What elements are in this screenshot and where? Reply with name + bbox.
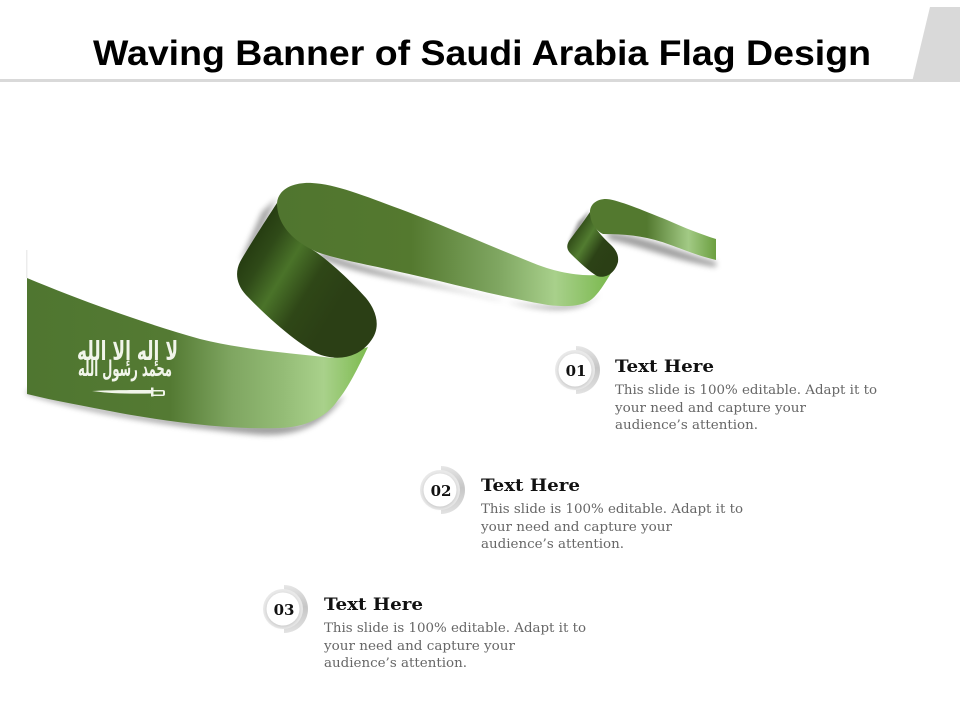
ribbon banner xyxy=(26,183,716,435)
ribbon fold: small dark xyxy=(567,212,618,277)
header rule xyxy=(0,79,914,82)
badge 02 xyxy=(420,466,465,514)
badge 03: 03 xyxy=(274,601,294,619)
body 01 xyxy=(614,383,877,433)
body 02: This slide is 100% editable. Adapt it to xyxy=(481,502,743,517)
ribbon segment: left with flag xyxy=(27,278,368,428)
badge 01: 01 xyxy=(566,362,586,380)
body 01: your need and capture your xyxy=(614,401,807,416)
heading 01: Text Here xyxy=(615,357,714,377)
heading 02: Text Here xyxy=(481,476,580,496)
item 03 xyxy=(263,585,586,671)
item 01 xyxy=(555,346,877,433)
body 02 xyxy=(480,502,743,552)
sword xyxy=(92,388,165,396)
faint left edge xyxy=(26,250,28,278)
ribbon fold: large dark xyxy=(237,203,377,358)
shahada inscription: لا إله إلا الله xyxy=(77,337,178,367)
flag emblem xyxy=(77,337,178,396)
badge 01 xyxy=(555,346,600,394)
body 03: This slide is 100% editable. Adapt it to xyxy=(324,621,586,636)
heading 03: Text Here xyxy=(324,595,423,615)
title: Waving Banner of Saudi Arabia Flag Design xyxy=(93,34,871,73)
shahada inscription xyxy=(77,337,178,382)
body 03: your need and capture your xyxy=(323,639,516,654)
body 02: your need and capture your xyxy=(480,520,673,535)
body 01: audience’s attention. xyxy=(615,418,758,433)
body 03 xyxy=(323,621,586,671)
badge 02: 02 xyxy=(431,482,451,500)
badge 03 xyxy=(263,585,308,633)
body 01: This slide is 100% editable. Adapt it to xyxy=(615,383,877,398)
header corner tab xyxy=(912,7,960,82)
shahada inscription: محمد رسول الله xyxy=(78,357,172,382)
item 02 xyxy=(420,466,743,552)
ribbon shadows xyxy=(27,198,716,435)
body 02: audience’s attention. xyxy=(481,537,624,552)
ribbon segment: right tail xyxy=(590,199,716,260)
body 03: audience’s attention. xyxy=(324,656,467,671)
ribbon segment: middle xyxy=(277,183,611,306)
